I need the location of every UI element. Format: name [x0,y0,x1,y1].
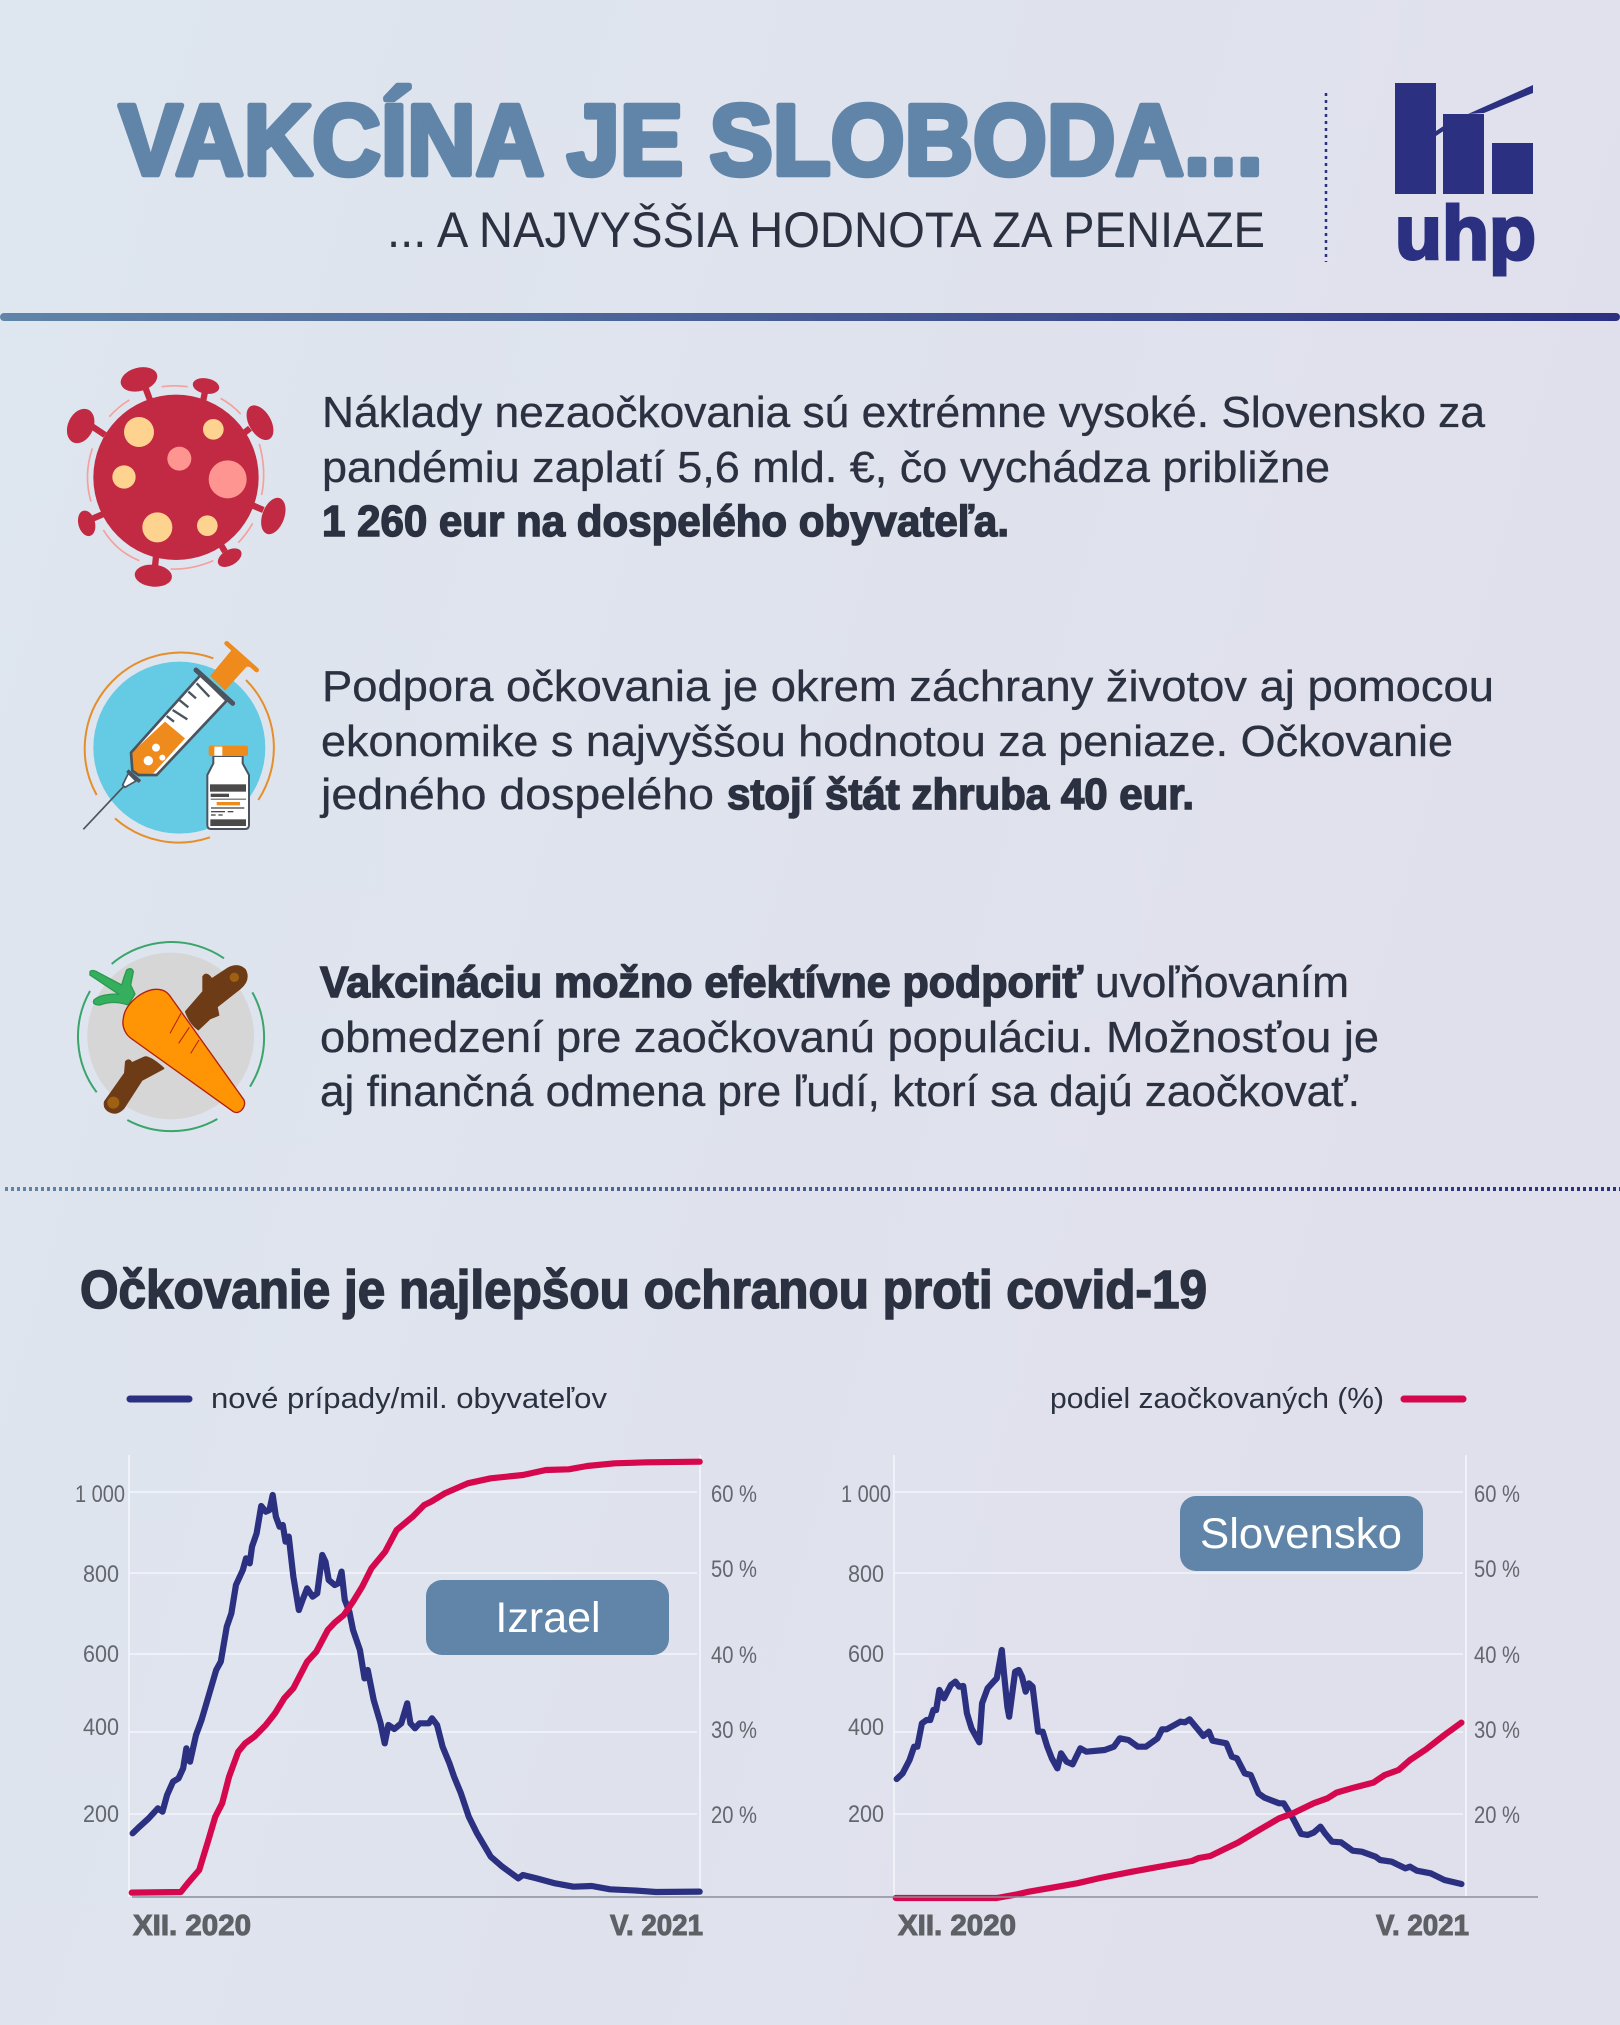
header [119,83,1536,276]
chart: Izrael: V. 2021 [610,1910,703,1942]
chart: Izrael [75,1455,757,1942]
chart: Izrael: XII. 2020 [133,1910,251,1942]
right axis labels [711,1481,757,1829]
text block: incentives [320,958,1379,1116]
legend: new cases: nové prípady/mil. obyvateľov [211,1383,608,1415]
left axis labels: 1 000 [841,1481,891,1508]
logo: uhp: uhp [1395,191,1536,276]
left axis labels [841,1481,891,1828]
line: new cases Izrael [133,1495,700,1892]
logo: uhp [1395,83,1536,276]
chart: Slovensko: XII. 2020 [898,1910,1016,1942]
right axis labels [1474,1481,1520,1829]
left axis labels: 1 000 [75,1481,125,1508]
text block: cost of not vaccinating: Náklady nezaočkovania sú extrémne vysoké. Slovensko za [322,388,1486,437]
text block: incentives: Vakcináciu možno efektívne podporiť [320,958,1084,1007]
icon: syringe and vial [83,643,274,843]
text block: incentives: obmedzení pre zaočkovanú populáciu. Možnosťou je [320,1013,1379,1062]
right axis labels: 50 % [1474,1556,1520,1583]
left axis labels: 800 [83,1561,119,1588]
text block: incentives: uvoľňovaním [1095,958,1349,1007]
left axis labels: 200 [83,1801,119,1828]
label: Izrael: Izrael [495,1594,601,1642]
chart heading: Očkovanie je najlepšou ochranou proti covid-19 [80,1260,1207,1320]
chart: Slovensko [841,1455,1520,1942]
left axis labels: 400 [83,1714,119,1741]
left axis labels: 400 [848,1714,884,1741]
text block: cost of not vaccinating [322,388,1486,546]
text block: cost of not vaccinating: pandémiu zaplatí 5,6 mld. €, čo vychádza približne [322,443,1330,492]
title: VAKCÍNA JE SLOBODA... [119,84,1263,196]
right axis labels: 40 % [1474,1642,1520,1669]
header divider [1325,93,1327,262]
label: Slovensko [1180,1496,1423,1571]
left axis labels: 800 [848,1561,884,1588]
right axis labels: 40 % [711,1642,757,1669]
line: vaccinated Slovensko [896,1723,1461,1898]
right axis labels: 60 % [711,1481,757,1508]
left axis labels [75,1481,125,1828]
text block: incentives: aj finančná odmena pre ľudí, ktorí sa dajú zaočkovať. [320,1067,1360,1116]
right axis labels: 30 % [1474,1717,1520,1744]
text block: vaccination value: ekonomike s najvyššou hodnotou za peniaze. Očkovanie [321,717,1453,766]
left axis labels: 600 [83,1641,119,1668]
left axis labels: 200 [848,1801,884,1828]
left axis labels: 600 [848,1641,884,1668]
label: Slovensko: Slovensko [1200,1510,1402,1558]
subtitle: ... A NAJVYŠŠIA HODNOTA ZA PENIAZE [387,202,1265,258]
text block: cost of not vaccinating: 1 260 eur na dospelého obyvateľa. [322,497,1009,546]
text block: vaccination value: jedného dospelého [319,770,714,819]
right axis labels: 30 % [711,1717,757,1744]
right axis labels: 50 % [711,1556,757,1583]
line: new cases Slovensko [897,1650,1461,1884]
right axis labels: 20 % [711,1802,757,1829]
right axis labels: 60 % [1474,1481,1520,1508]
right axis labels: 20 % [1474,1802,1520,1829]
chart: Slovensko: V. 2021 [1376,1910,1469,1942]
text block: vaccination value: Podpora očkovania je okrem záchrany životov aj pomocou [322,662,1494,711]
text block: vaccination value [319,662,1494,819]
label: Izrael [426,1580,669,1655]
legend: vaccinated share: podiel zaočkovaných (%) [1050,1383,1384,1415]
text block: vaccination value: stojí štát zhruba 40 eur. [727,770,1194,819]
icon: coronavirus [62,363,290,588]
icon: carrot and sticks [78,942,264,1131]
header rule [0,313,1620,321]
line: vaccinated Izrael [132,1462,700,1893]
